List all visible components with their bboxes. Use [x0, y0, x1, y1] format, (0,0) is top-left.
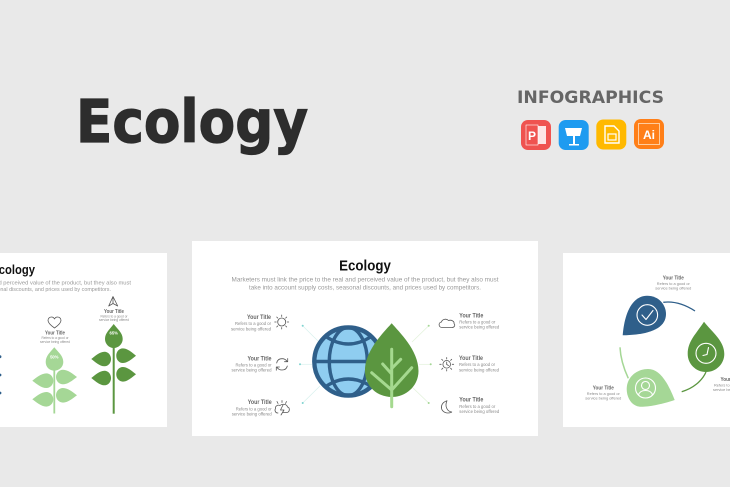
icon: PowerPoint: [521, 120, 551, 150]
left label: Refers to a good or: [587, 391, 620, 396]
icon: Google Slides: [596, 120, 626, 150]
connector lines and dots: [299, 325, 432, 404]
left label: Your Title: [593, 386, 614, 392]
icon: Keynote: [559, 120, 589, 150]
item: storm, left bottom: Your Title: [248, 399, 272, 406]
panel: left slide with plants: [0, 253, 167, 427]
clipped list dots: [0, 355, 1, 394]
light plant label: Your Title: [45, 330, 65, 336]
item: sun with clock, right middle: Your Title: [459, 355, 483, 362]
top label: Refers to a good or: [657, 281, 690, 286]
item: moon, right bottom: Refers to a good or: [459, 404, 496, 410]
left label: [585, 386, 621, 400]
item: refresh, left middle: service being offered: [232, 368, 272, 374]
panel: center slide: [192, 241, 538, 436]
light green leaf with person icon: [620, 347, 675, 407]
item: refresh, left middle: Refers to a good or: [236, 363, 272, 369]
light plant label: service being offered: [40, 339, 70, 344]
item: cloud, right top: [439, 312, 500, 331]
item: storm, left bottom: Refers to a good or: [236, 406, 272, 412]
right clipped label: [713, 377, 730, 392]
dark green leaf with clock icon: [682, 322, 724, 392]
dark plant label: Your Title: [104, 309, 124, 315]
icon: navigation arrow: [109, 296, 118, 306]
item: sun, left top: [231, 314, 289, 332]
dark plant label: [99, 309, 129, 322]
dark plant label: service being offered: [99, 317, 129, 322]
light plant label: Refers to a good or: [42, 335, 69, 340]
center slide subtitle: take into account supply costs, seasonal discounts, and prices used by competitors.: [249, 285, 481, 292]
light plant label: [40, 330, 70, 344]
left slide subtitle: [0, 280, 132, 293]
item: sun, left top: Your Title: [247, 314, 271, 321]
item: refresh, left middle: [232, 356, 288, 374]
blue leaf with check icon: [623, 296, 695, 335]
dark plant label: Refers to a good or: [100, 314, 128, 318]
item: storm, left bottom: [232, 399, 289, 418]
center slide subtitle: Marketers must link the price to the real and perceived value of the product, but they also must: [232, 277, 499, 284]
dark green plant: 65%: [110, 330, 118, 336]
item: sun with clock, right middle: Refers to a good or: [459, 362, 495, 368]
item: cloud, right top: service being offered: [459, 325, 500, 331]
item: sun, left top: Refers to a good or: [235, 321, 271, 327]
item: cloud, right top: Refers to a good or: [459, 319, 496, 325]
top label: [655, 276, 691, 290]
software icons row: [521, 119, 664, 150]
panel: right slide with leaf cycle: [563, 253, 730, 427]
item: sun with clock, right middle: service being offered: [459, 367, 499, 373]
item: moon, right bottom: Your Title: [459, 397, 484, 404]
item: cloud, right top: Your Title: [459, 312, 484, 319]
center slide title: Ecology: [339, 259, 391, 275]
light green plant: 50%: [50, 354, 59, 360]
item: moon, right bottom: [441, 397, 500, 415]
left label: service being offered: [585, 396, 621, 400]
item: sun with clock, right middle: [440, 355, 499, 373]
light green plant: [32, 347, 77, 414]
icon: PowerPoint: P: [528, 129, 536, 143]
top label: service being offered: [655, 286, 691, 290]
icon: Illustrator: [634, 119, 664, 149]
top label: Your Title: [663, 276, 684, 282]
item: sun, left top: service being offered: [231, 326, 271, 332]
main title: Ecology: [76, 87, 308, 156]
dark green plant: [91, 324, 136, 414]
leaf: [365, 323, 418, 407]
item: refresh, left middle: Your Title: [248, 356, 272, 363]
icon: heart: [48, 317, 61, 328]
item: storm, left bottom: service being offered: [232, 412, 272, 418]
infographics heading: INFOGRAPHICS: [517, 88, 664, 107]
center slide subtitle: [232, 277, 499, 292]
globe: [314, 328, 382, 396]
icon: Illustrator: Ai: [643, 128, 655, 142]
item: moon, right bottom: service being offered: [459, 409, 500, 415]
